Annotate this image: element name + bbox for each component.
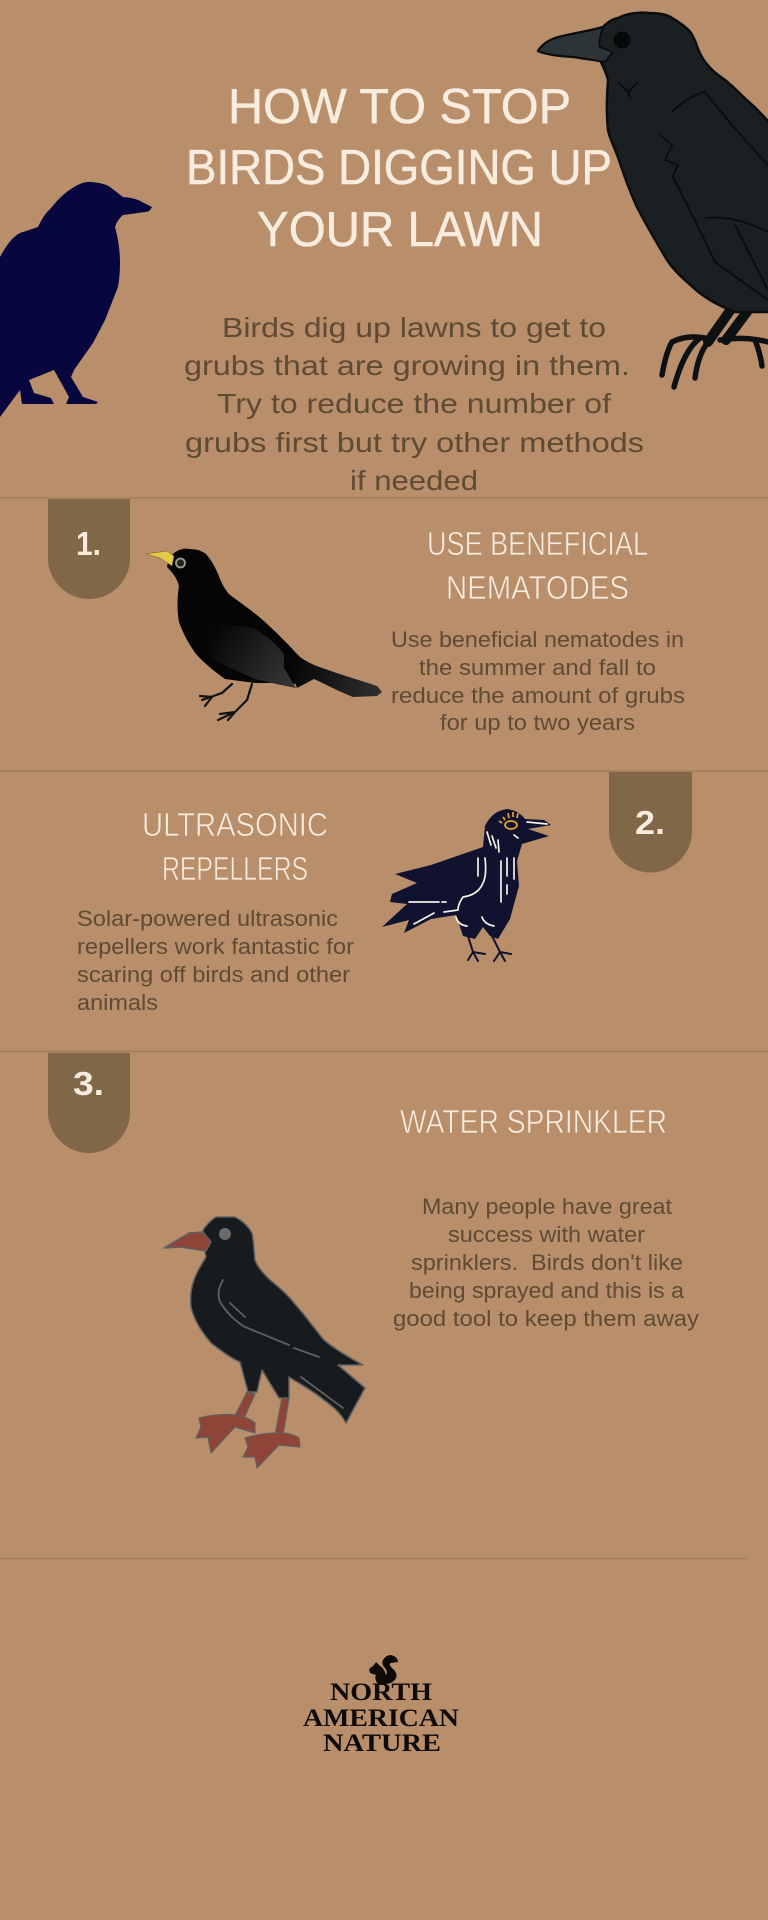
step 1 text: reduce the amount of grubs	[391, 683, 685, 708]
step 3 text: good tool to keep them away	[393, 1306, 699, 1331]
step 2 text: Solar-powered ultrasonic	[77, 906, 338, 931]
crow beak	[164, 1232, 211, 1251]
intro text: Birds dig up lawns to get to	[222, 312, 606, 343]
panel: step 2	[77, 772, 692, 1015]
logo: North American Nature	[303, 1655, 460, 1757]
title: HOW TO STOP	[228, 80, 571, 134]
intro text: if needed	[350, 465, 478, 496]
number tab 1	[48, 499, 130, 599]
number tab 3: 3.	[73, 1065, 104, 1102]
crow body	[538, 13, 768, 312]
step 2 text: repellers work fantastic for	[77, 934, 354, 959]
intro text: grubs that are growing in them.	[184, 350, 630, 381]
step 2 heading: REPELLERS	[162, 851, 308, 888]
panel: step 3	[48, 1053, 699, 1468]
bird eye	[176, 558, 185, 568]
title	[186, 80, 612, 257]
logo wordmark: NORTH	[330, 1677, 432, 1706]
crow eye	[614, 32, 630, 48]
step 1 text	[391, 627, 685, 735]
intro text: Try to reduce the number of	[217, 388, 611, 419]
crow legs and feet	[196, 1392, 300, 1468]
step 3 text: Many people have great	[422, 1194, 672, 1219]
number tab 2	[609, 772, 692, 872]
step 1 heading: USE BENEFICIAL	[427, 526, 648, 563]
bird beak	[146, 551, 174, 566]
crow beak	[538, 27, 613, 62]
step 2 heading	[142, 807, 328, 888]
title: BIRDS DIGGING UP	[186, 141, 612, 195]
step 2 text	[77, 906, 354, 1015]
step 3 text: being sprayed and this is a	[409, 1278, 685, 1303]
step 1 heading: NEMATODES	[446, 570, 629, 607]
step 3 text: success with water	[448, 1222, 645, 1247]
logo wordmark: NATURE	[323, 1728, 441, 1757]
step 1 text: the summer and fall to	[419, 655, 656, 680]
intro text: grubs first but try other methods	[185, 427, 644, 458]
icon: navy stylised crow	[382, 809, 551, 961]
icon: large black crow	[538, 13, 768, 387]
step 2 heading: ULTRASONIC	[142, 807, 328, 844]
number tab 3	[48, 1053, 130, 1153]
crow markings	[409, 822, 547, 926]
logo wordmark	[303, 1677, 460, 1757]
number tab 2: 2.	[635, 804, 665, 841]
step 1 heading	[427, 526, 648, 607]
bird wing	[203, 624, 296, 688]
icon: blackbird	[146, 549, 382, 720]
crow feather lines	[618, 82, 768, 300]
step 2 text: animals	[77, 990, 158, 1015]
crow wing lines	[219, 1280, 343, 1408]
step 3 text	[393, 1194, 699, 1331]
crow body	[191, 1217, 365, 1423]
crow eye	[499, 812, 518, 829]
bird tail	[284, 654, 382, 697]
step 1 text: Use beneficial nematodes in	[391, 627, 684, 652]
crow eye	[219, 1228, 231, 1240]
number tab 1: 1.	[76, 525, 101, 562]
step 3 text: sprinklers. Birds don't like	[411, 1250, 683, 1275]
intro text	[184, 312, 644, 496]
logo wordmark: AMERICAN	[303, 1703, 460, 1732]
crow legs and claws	[662, 305, 768, 387]
title: YOUR LAWN	[257, 203, 543, 257]
icon: squirrel	[369, 1655, 398, 1684]
panel: step 1	[48, 499, 685, 735]
step 3 heading: WATER SPRINKLER	[400, 1104, 667, 1141]
step 1 text: for up to two years	[440, 710, 635, 735]
step 2 text: scaring off birds and other	[77, 962, 350, 987]
icon: red-billed crow	[164, 1217, 365, 1468]
icon: navy crow silhouette	[0, 182, 152, 417]
